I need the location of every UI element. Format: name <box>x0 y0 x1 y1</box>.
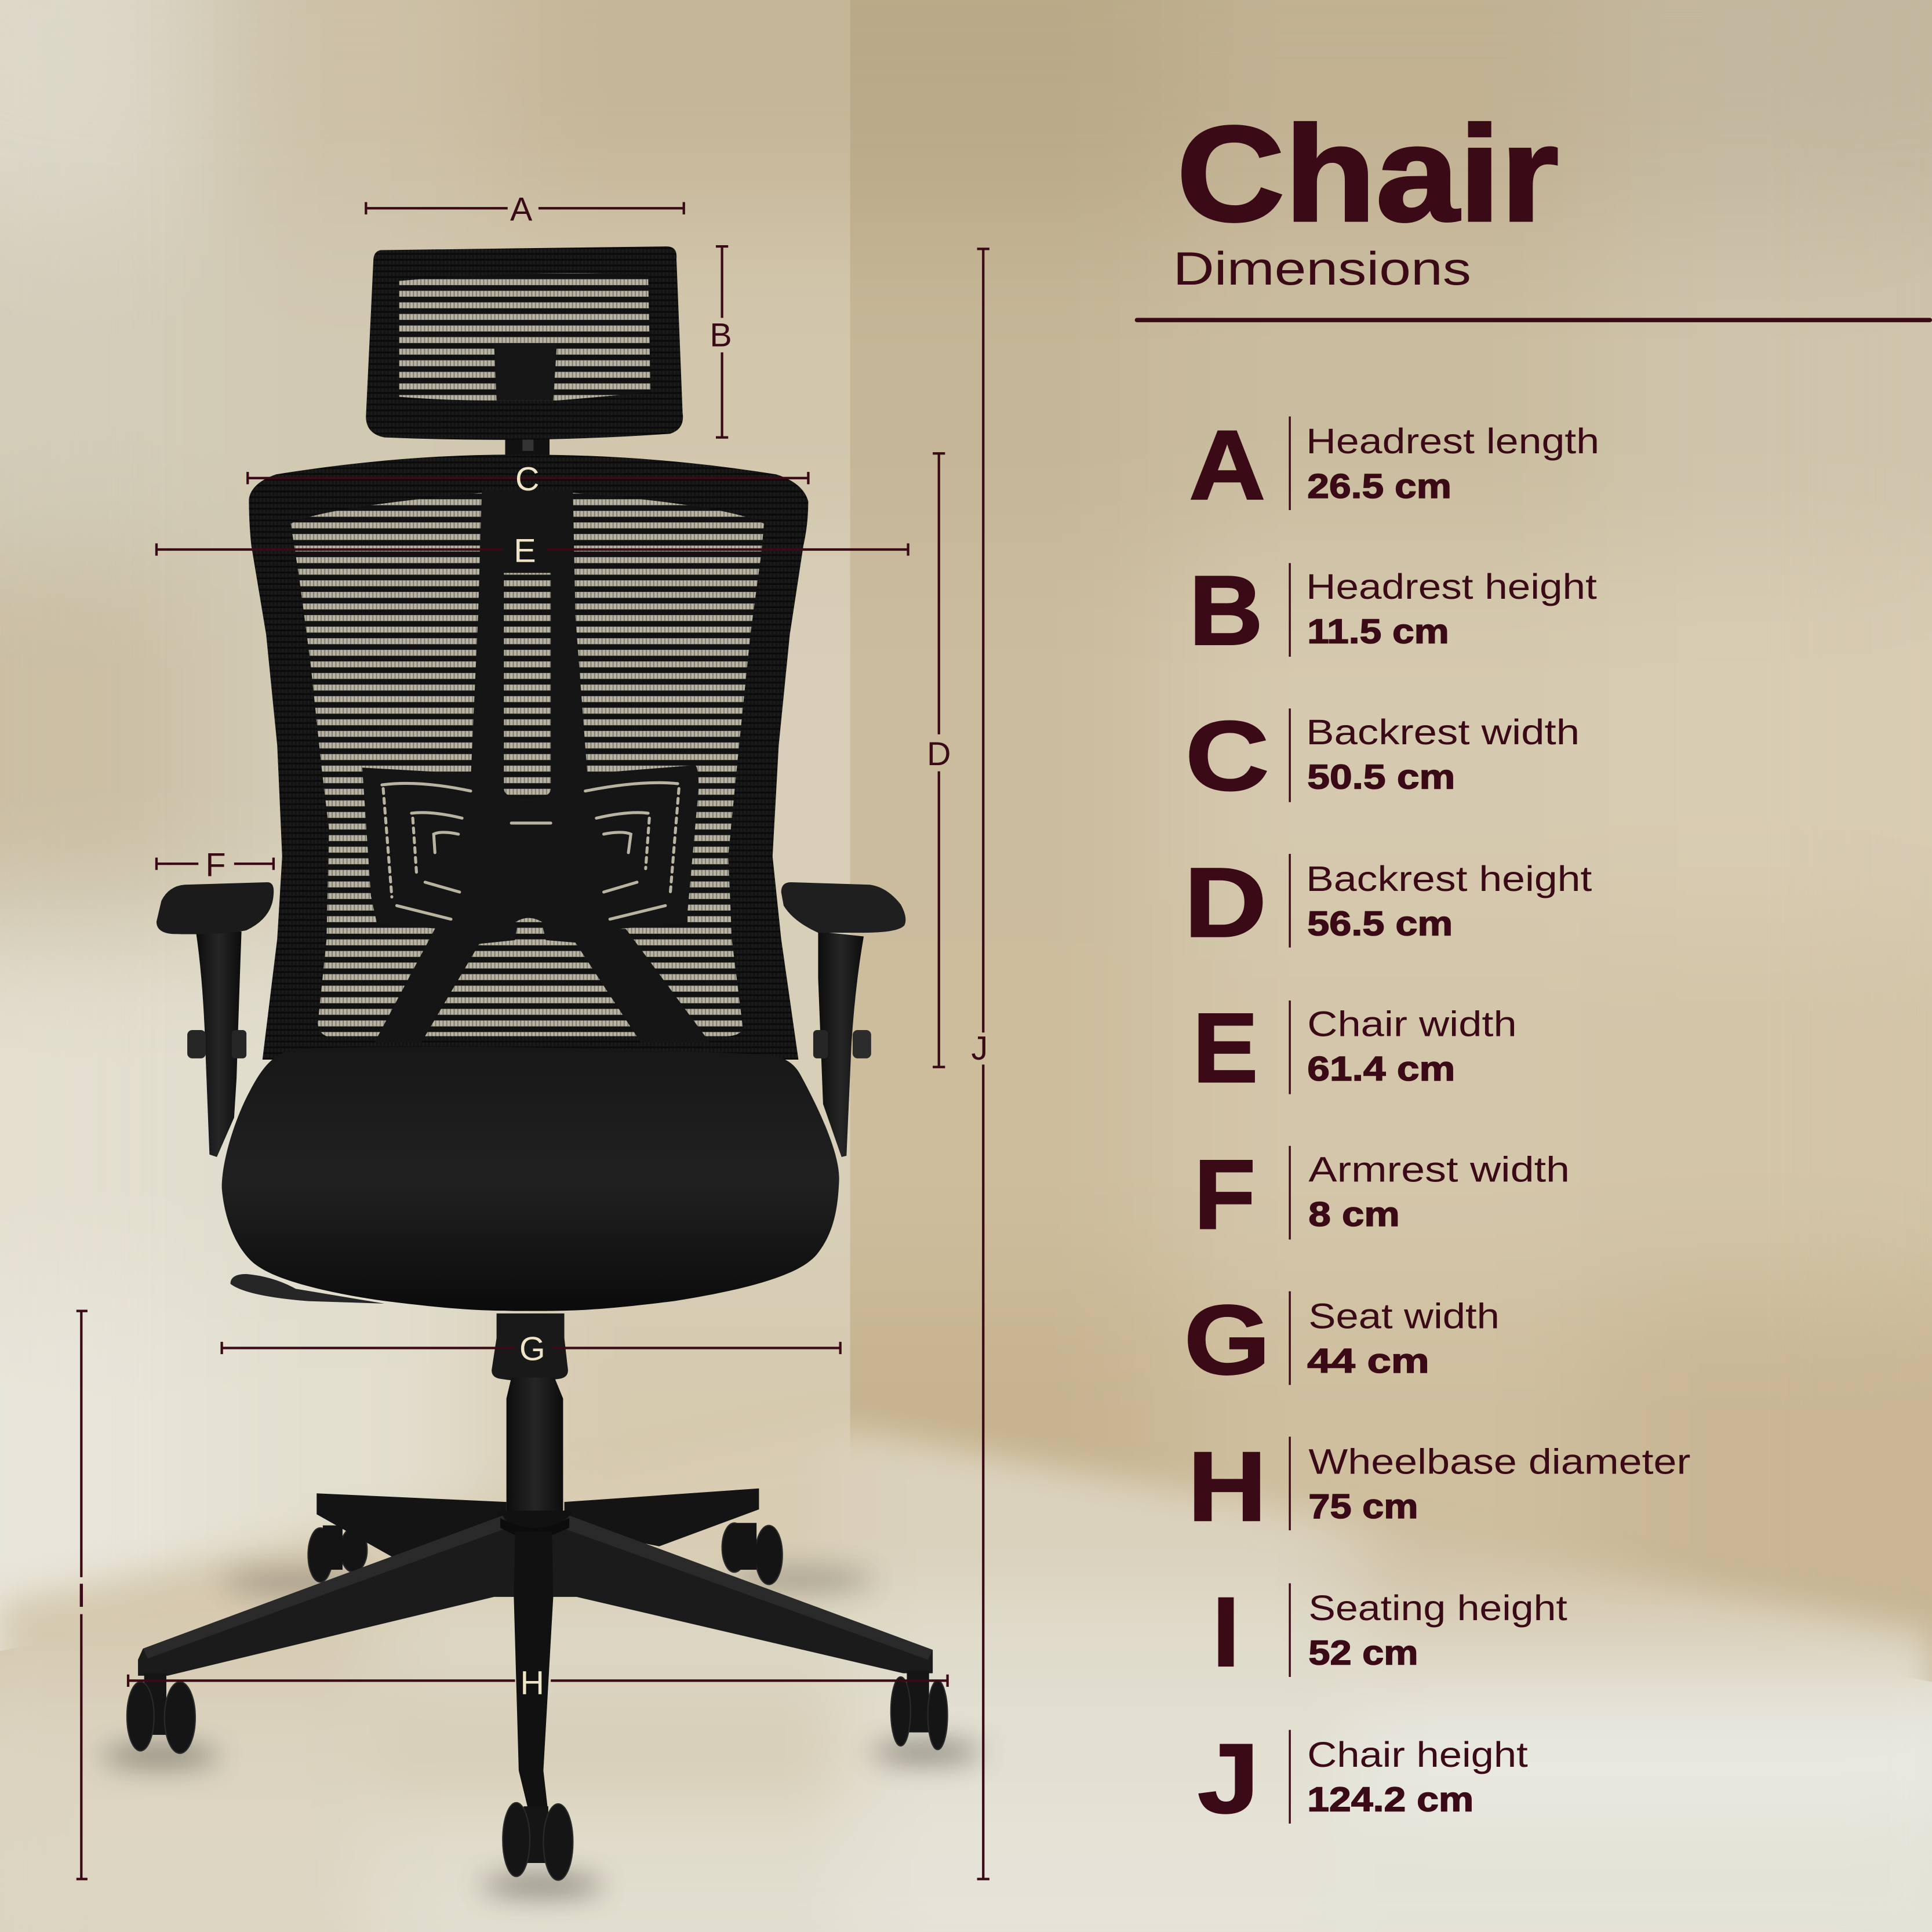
dimension A: A <box>510 191 533 228</box>
row B: Headrest height <box>1306 567 1597 607</box>
dimension E: E <box>514 532 536 569</box>
row D: Backrest height <box>1306 859 1592 899</box>
dimension B: B <box>710 316 732 354</box>
row H: H <box>1188 1432 1267 1542</box>
dimension B <box>710 246 732 438</box>
row F <box>1194 1140 1570 1250</box>
row G: G <box>1184 1285 1271 1395</box>
row E: E <box>1193 993 1258 1103</box>
dimension C <box>248 461 808 498</box>
left lower strut <box>374 924 518 1042</box>
dimension I: I <box>77 1577 86 1614</box>
dimension H: H <box>521 1665 544 1702</box>
headrest <box>366 246 683 459</box>
row J <box>1198 1724 1528 1834</box>
row D: D <box>1184 847 1267 958</box>
row H: Wheelbase diameter <box>1308 1442 1690 1482</box>
backrest mesh <box>249 454 808 1060</box>
row H <box>1188 1432 1690 1542</box>
row C <box>1185 701 1580 812</box>
dimension E <box>157 532 908 569</box>
row B: 11.5 cm <box>1307 612 1449 651</box>
row D: 56.5 cm <box>1307 904 1453 943</box>
dimension D: D <box>927 736 951 773</box>
chair photo <box>101 246 982 1895</box>
dimension C: C <box>515 461 539 498</box>
row G: 44 cm <box>1307 1341 1429 1380</box>
row I <box>1213 1577 1567 1687</box>
dimension H <box>128 1665 948 1702</box>
mesh window <box>291 493 764 1036</box>
row B: B <box>1189 556 1263 666</box>
dimension I <box>77 1311 88 1879</box>
casters back <box>308 1523 783 1585</box>
dimension J: J <box>972 1030 988 1067</box>
subtitle: Dimensions <box>1173 243 1471 295</box>
row F: F <box>1194 1140 1256 1250</box>
central spine <box>471 490 588 778</box>
row I: Seating height <box>1308 1588 1567 1628</box>
floor <box>0 1355 1932 1932</box>
dimension J <box>972 249 989 1879</box>
row A: 26.5 cm <box>1307 467 1451 505</box>
title: Chair <box>1177 97 1559 249</box>
spine centre mesh <box>504 573 551 798</box>
floor underlay <box>0 1649 1932 1932</box>
dimension D <box>927 453 951 1067</box>
gas lift column <box>492 1314 568 1523</box>
right wall <box>850 0 1932 1682</box>
row H: 75 cm <box>1308 1487 1418 1526</box>
dimension G <box>222 1331 841 1368</box>
dimension A <box>366 191 684 228</box>
row C: 50.5 cm <box>1307 757 1455 796</box>
lumbar pad <box>362 765 698 929</box>
left wall <box>0 0 850 1651</box>
seat cushion <box>222 1047 839 1311</box>
row B <box>1189 556 1597 666</box>
row J: Chair height <box>1307 1735 1528 1775</box>
dimension F <box>157 846 274 883</box>
row J: 124.2 cm <box>1307 1780 1473 1819</box>
row I: 52 cm <box>1308 1633 1418 1672</box>
row A: A <box>1189 410 1265 521</box>
five-star base <box>138 1489 933 1816</box>
shadows under chair <box>101 1569 982 1895</box>
row A <box>1189 410 1599 521</box>
row A: Headrest length <box>1306 421 1599 461</box>
row E: Chair width <box>1307 1005 1517 1045</box>
row E: 61.4 cm <box>1307 1049 1455 1088</box>
row D <box>1184 847 1592 958</box>
row G: Seat width <box>1308 1296 1500 1336</box>
row C: Backrest width <box>1306 712 1580 752</box>
seat lever <box>230 1274 384 1304</box>
row I: I <box>1213 1577 1239 1687</box>
row F: 8 cm <box>1308 1195 1400 1234</box>
row E <box>1193 993 1517 1103</box>
row F: Armrest width <box>1308 1149 1570 1189</box>
row J: J <box>1198 1724 1259 1834</box>
row G <box>1184 1285 1500 1395</box>
armrest right <box>781 882 905 1157</box>
heading rule <box>1135 318 1932 322</box>
dimension F: F <box>205 846 226 883</box>
casters front <box>127 1671 948 1880</box>
row C: C <box>1185 701 1269 812</box>
right lower strut <box>542 924 710 1042</box>
lumbar slots <box>382 783 679 919</box>
dimension G: G <box>519 1331 545 1368</box>
armrest left <box>157 882 274 1157</box>
